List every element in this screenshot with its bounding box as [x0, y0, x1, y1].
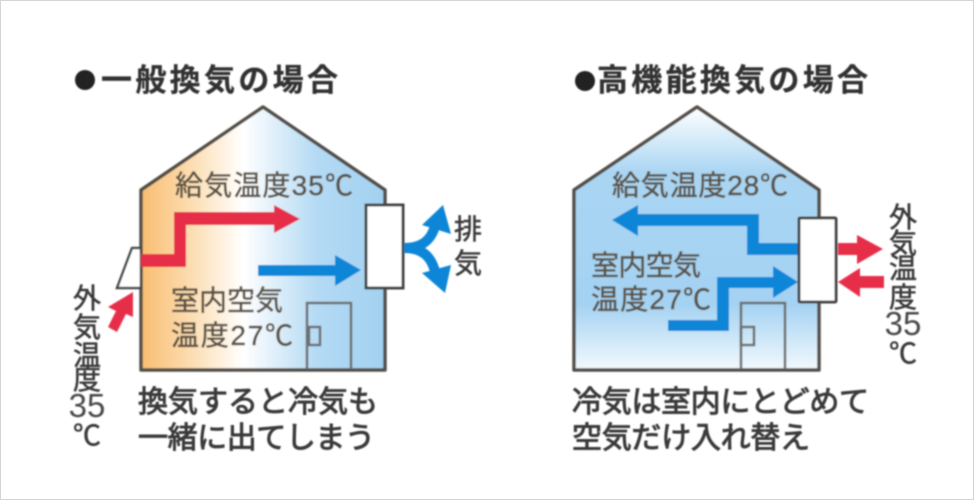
label: supply air temperature: 給気温度35℃ — [175, 170, 353, 201]
caption: 空気だけ入れ替え — [572, 422, 810, 455]
label: outside temperature: 温 — [889, 253, 917, 284]
arrow: indoor air to unit — [668, 266, 798, 331]
label: outside temperature: 35 — [69, 387, 105, 424]
label: indoor air: 室内空気 — [171, 285, 283, 316]
arrow: outside air in — [108, 292, 133, 332]
panel: general ventilation — [69, 63, 482, 455]
label: outside temperature: 35 — [885, 305, 921, 342]
caption: 冷気は室内にとどめて — [572, 386, 869, 419]
ventilation unit — [799, 218, 836, 302]
label: outside temperature: 度 — [889, 282, 917, 313]
label: exhaust: 排 — [454, 214, 482, 245]
label: exhaust — [454, 214, 482, 279]
label: indoor air: 室内空気 — [591, 250, 701, 281]
label: outside temperature: 外 — [889, 202, 917, 233]
caption — [138, 386, 378, 455]
label: outside temperature: 温 — [73, 340, 101, 371]
heading: high-performance ventilation: 高機能換気の場合 — [597, 63, 868, 98]
door — [307, 303, 351, 369]
label: outside temperature: 度 — [73, 364, 101, 395]
ventilation unit — [366, 205, 403, 288]
arrow: indoor air to unit — [258, 255, 361, 286]
label: indoor temperature: 温度27℃ — [171, 320, 293, 351]
label: outside temperature — [885, 202, 921, 369]
door — [741, 303, 785, 369]
label: supply air temperature: 給気温度28℃ — [612, 170, 788, 201]
house outline — [574, 107, 819, 370]
heading: general ventilation: 一般換気の場合 — [101, 63, 338, 98]
label: outside temperature: 気 — [73, 312, 101, 343]
arrow: cooled supply air — [612, 205, 799, 255]
caption — [572, 386, 869, 455]
label: outside temperature: 外 — [73, 283, 101, 314]
label: outside temperature: ℃ — [73, 420, 101, 451]
house outline — [141, 107, 385, 370]
caption: 換気すると冷気も — [138, 386, 378, 419]
arrow: outside air in — [838, 268, 884, 297]
label: outside temperature: 気 — [889, 228, 917, 259]
label: outside temperature — [69, 283, 105, 451]
intake vent — [117, 248, 141, 288]
caption: 一緒に出てしまう — [138, 422, 375, 455]
arrow: exhaust out — [838, 235, 883, 264]
arrow: exhaust split — [404, 205, 451, 293]
label: outside temperature: ℃ — [889, 338, 917, 369]
label: indoor temperature: 温度27℃ — [591, 284, 711, 315]
panel: high-performance ventilation — [572, 63, 921, 455]
label: exhaust: 気 — [454, 248, 482, 279]
arrow: hot supply air — [141, 205, 300, 267]
